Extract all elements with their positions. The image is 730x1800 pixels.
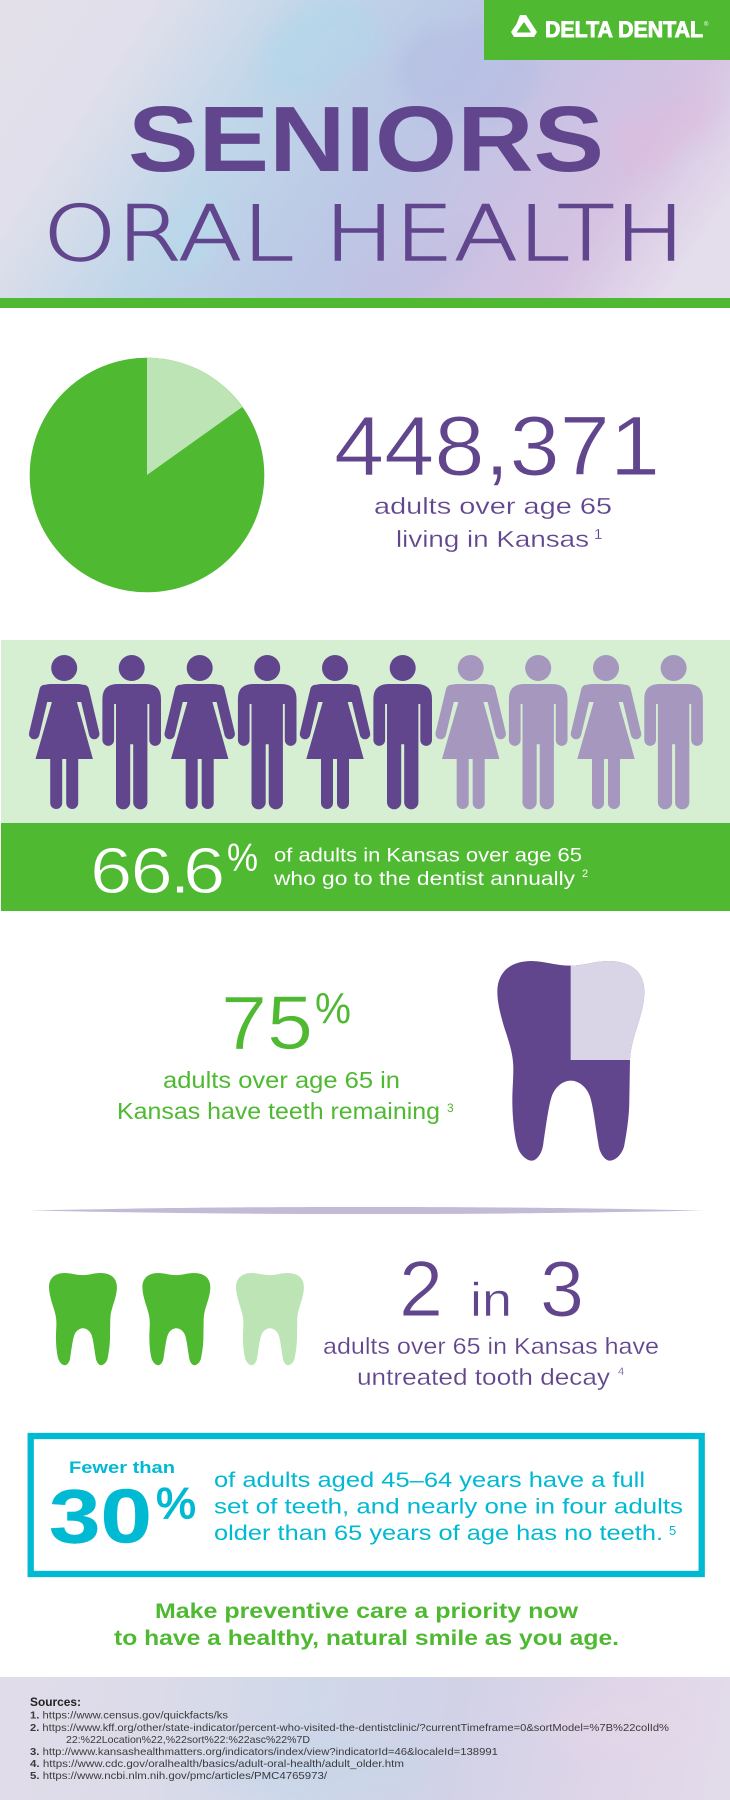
call to action [114, 1600, 619, 1650]
population caption: living in Kansas [396, 526, 589, 552]
decay caption: untreated tooth decay [357, 1364, 611, 1390]
call to action: to have a healthy, natural smile as you age. [114, 1627, 619, 1650]
stat: 448,371: 448,371 [334, 399, 660, 493]
callout text: older than 65 years of age has no teeth. [214, 1522, 663, 1545]
teeth remaining caption: Kansas have teeth remaining [117, 1098, 440, 1124]
header panel [0, 0, 730, 332]
teeth remaining caption: 3 [447, 1101, 454, 1115]
panel: population [30, 358, 660, 592]
title: seniors: SENIORS [128, 87, 604, 191]
registered mark: ® [704, 21, 709, 28]
stat: 2 in 3: 3 [540, 1244, 584, 1333]
population caption: adults over age 65 [374, 493, 612, 519]
sources text: 5. https://www.ncbi.nlm.nih.gov/pmc/articles/PMC4765973/ [30, 1770, 327, 1782]
icon: two of three teeth [49, 1273, 304, 1365]
callout text: set of teeth, and nearly one in four adults [214, 1496, 683, 1518]
stat: 66.6%: % [227, 837, 258, 880]
panel: dentist visits [1, 640, 730, 911]
decay caption [323, 1333, 659, 1390]
stat: 2 in 3 [399, 1244, 584, 1333]
stat: 75%: % [315, 984, 351, 1033]
sources watercolor background [0, 1677, 730, 1800]
green header rule [0, 298, 730, 308]
dentist caption: 2 [582, 868, 588, 880]
sources text: 1. https://www.census.gov/quickfacts/ks [30, 1710, 228, 1722]
sources text: Sources: [30, 1695, 81, 1709]
teeth remaining caption [117, 1067, 454, 1124]
decay caption: adults over 65 in Kansas have [323, 1333, 659, 1359]
sources text: 3. http://www.kansashealthmatters.org/indicators/index/view?indicatorId=46&localeId=138991 [30, 1746, 498, 1758]
sources text: 22:%22Location%22,%22sort%22:%22asc%22%7D [66, 1734, 310, 1746]
icon: delta triangle [511, 15, 537, 37]
stat: 66.6%: 66.6 [90, 834, 225, 907]
callout text [214, 1469, 683, 1545]
callout border [31, 1436, 702, 1574]
sources text: 2. https://www.kff.org/other/state-indicator/percent-who-visited-the-dentistclinic/?currentTimeframe=0&sortModel=%7B%22colId% [30, 1722, 669, 1734]
sources text [30, 1695, 669, 1782]
callout text: of adults aged 45–64 years have a full [214, 1469, 645, 1492]
dentist caption: of adults in Kansas over age 65 [274, 844, 582, 866]
icon: three-quarter tooth [497, 961, 644, 1161]
decay caption: 4 [618, 1366, 624, 1378]
panel: untreated decay [49, 1244, 659, 1390]
logo wordmark: DELTA DENTAL [545, 17, 703, 42]
sources text: 4. https://www.cdc.gov/oralhealth/basics/adult-oral-health/adult_older.htm [30, 1758, 404, 1770]
fewer than label: Fewer than [69, 1458, 175, 1477]
dentist caption [273, 844, 588, 890]
header watercolor background [0, 0, 730, 298]
stat: 2 in 3: 2 [399, 1244, 443, 1333]
population caption [374, 493, 612, 552]
panel: teeth remaining [117, 961, 644, 1161]
panel: fewer than 30% callout [31, 1436, 702, 1574]
pie chart [30, 358, 264, 592]
population caption: 1 [594, 526, 602, 543]
pale green band [1, 640, 730, 823]
title: oral health: ORAL HEALTH [43, 189, 685, 278]
dentist caption: who go to the dentist annually [273, 868, 575, 890]
stat: 30% [49, 1474, 196, 1560]
green stat band [1, 823, 730, 911]
call to action: Make preventive care a priority now [155, 1600, 579, 1623]
teeth remaining caption: adults over age 65 in [163, 1067, 400, 1093]
stat: 75% [221, 981, 351, 1066]
people pictogram [34, 655, 703, 809]
stat: 30%: 30 [49, 1474, 152, 1560]
stat: 75%: 75 [221, 981, 313, 1066]
callout text: 5 [669, 1523, 676, 1538]
panel: sources [0, 1677, 730, 1800]
stat: 2 in 3: in [470, 1273, 512, 1326]
logo box [484, 0, 730, 60]
stat: 30%: % [156, 1479, 196, 1528]
